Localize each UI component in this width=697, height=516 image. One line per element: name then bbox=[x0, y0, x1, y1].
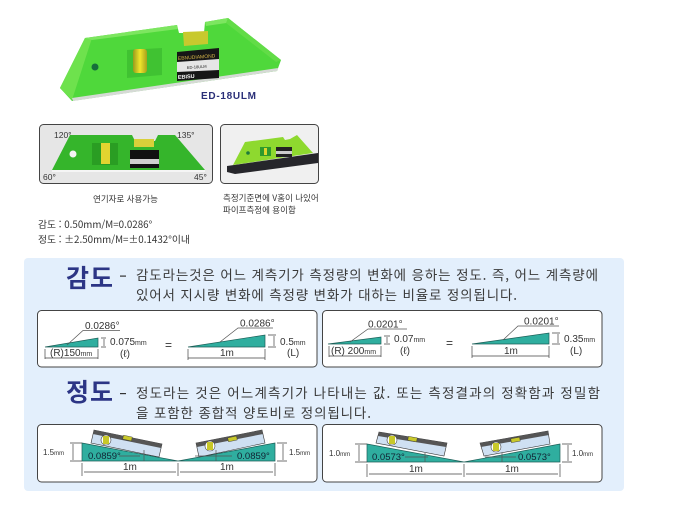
panel: sensitivity diagram 2: 1m bbox=[504, 346, 518, 357]
product image: green level: ED-18ULM bbox=[187, 64, 207, 70]
dash and sensitivity description bbox=[120, 264, 598, 304]
dash and sensitivity description: 감도라는것은 어느 계측기가 측정량의 변화에 응하는 정도. 즉, 어느 계측량에 bbox=[136, 264, 598, 284]
large wedge bbox=[188, 335, 265, 347]
equals: = bbox=[165, 338, 172, 352]
panel: sensitivity diagram 1: 0.5mm bbox=[280, 337, 306, 348]
panel: angle photo bbox=[40, 124, 212, 184]
heading: accuracy: 정도 bbox=[66, 373, 113, 409]
model name: ED-18ULM bbox=[201, 91, 256, 102]
panel: sensitivity diagram 1: 0.0286° bbox=[240, 318, 275, 330]
panel: sensitivity diagram 2 bbox=[322, 310, 602, 367]
panel: accuracy diagram 2: 0.0573° bbox=[518, 452, 551, 463]
dash and accuracy description: 을 포함한 종합적 양토비로 정의됩니다. bbox=[136, 402, 371, 422]
panel: sensitivity diagram 2: (R) 200mm bbox=[331, 346, 376, 357]
panel: accuracy diagram 2 bbox=[322, 424, 602, 482]
panel: accuracy diagram 1 bbox=[38, 424, 317, 482]
panel: blue background bbox=[24, 258, 624, 491]
panel: sensitivity diagram 2: 0.35mm bbox=[564, 334, 595, 345]
panel: sensitivity diagram 1: (ℓ) bbox=[120, 349, 130, 360]
panel: sensitivity diagram 1: (L) bbox=[287, 348, 299, 359]
angle labels: 120° bbox=[54, 130, 72, 140]
panel: accuracy diagram 2: 1.0mm bbox=[572, 449, 593, 458]
product image: green level: EBISU bbox=[178, 74, 195, 81]
small wedge bbox=[45, 338, 98, 347]
panel: sensitivity diagram 1: 0.0286° bbox=[85, 321, 120, 332]
panel: accuracy diagram 1: 1m bbox=[220, 462, 234, 473]
panel: accuracy diagram 2: 0.0573° bbox=[372, 452, 405, 463]
panel: accuracy diagram 1: 1.5mm bbox=[289, 448, 310, 457]
panel: sensitivity diagram 2: 0.0201° bbox=[524, 316, 559, 328]
caption: pipe: 측정기준면에 V홈이 나있어 bbox=[223, 192, 319, 204]
label text on level: EBNUDIAMOND bbox=[178, 53, 216, 62]
spec text: 감도 : 0.50mm/M=0.0286° bbox=[38, 217, 153, 231]
panel: accuracy diagram 1: 0.0859° bbox=[88, 451, 121, 462]
dash and sensitivity description: 있어서 지시량 변화에 측정량 변화가 대하는 비율로 정의됩니다. bbox=[136, 284, 517, 304]
caption: angle: 연기자로 사용가능 bbox=[93, 193, 158, 205]
panel: accuracy diagram 2: 1m bbox=[409, 464, 423, 475]
panel: sensitivity diagram 2: (ℓ) bbox=[400, 346, 410, 357]
panel: accuracy diagram 1: 1.5mm bbox=[43, 448, 64, 457]
panel: angle photo: 135° bbox=[177, 130, 195, 140]
panel: sensitivity diagram 1: 1m bbox=[220, 348, 234, 359]
equals: = bbox=[446, 336, 453, 350]
panel: sensitivity diagram 1 bbox=[38, 310, 317, 367]
caption: pipe: 파이프측정에 용이함 bbox=[223, 204, 296, 216]
panel: sensitivity diagram 1: (R)150mm bbox=[50, 348, 92, 359]
product image: green level bbox=[60, 18, 281, 101]
panel: angle photo: 60° bbox=[43, 172, 56, 182]
panel: sensitivity diagram 2: 0.0201° bbox=[368, 320, 403, 330]
heading: sensitivity: 감도 bbox=[66, 259, 113, 295]
spec text: 정도 : ±2.50mm/M=±0.1432°이내 bbox=[38, 232, 190, 246]
dash and accuracy description bbox=[120, 382, 600, 422]
panel: accuracy diagram 2: 1.0mm bbox=[329, 449, 350, 458]
panel: sensitivity diagram 2: 0.07mm bbox=[394, 334, 425, 345]
panel: pipe photo bbox=[220, 124, 318, 184]
panel: sensitivity diagram 2: (L) bbox=[570, 346, 582, 357]
dash and accuracy description: 정도라는 것은 어느계측기가 나타내는 값. 또는 측정결과의 정확함과 정밀함 bbox=[136, 382, 600, 402]
panel: accuracy diagram 2: 1m bbox=[505, 464, 519, 475]
panel: accuracy diagram 1: 1m bbox=[123, 462, 137, 473]
panel: angle photo: 45° bbox=[194, 172, 207, 182]
panel: sensitivity diagram 1: 0.075mm bbox=[110, 337, 147, 348]
panel: accuracy diagram 1: 0.0859° bbox=[237, 451, 270, 462]
